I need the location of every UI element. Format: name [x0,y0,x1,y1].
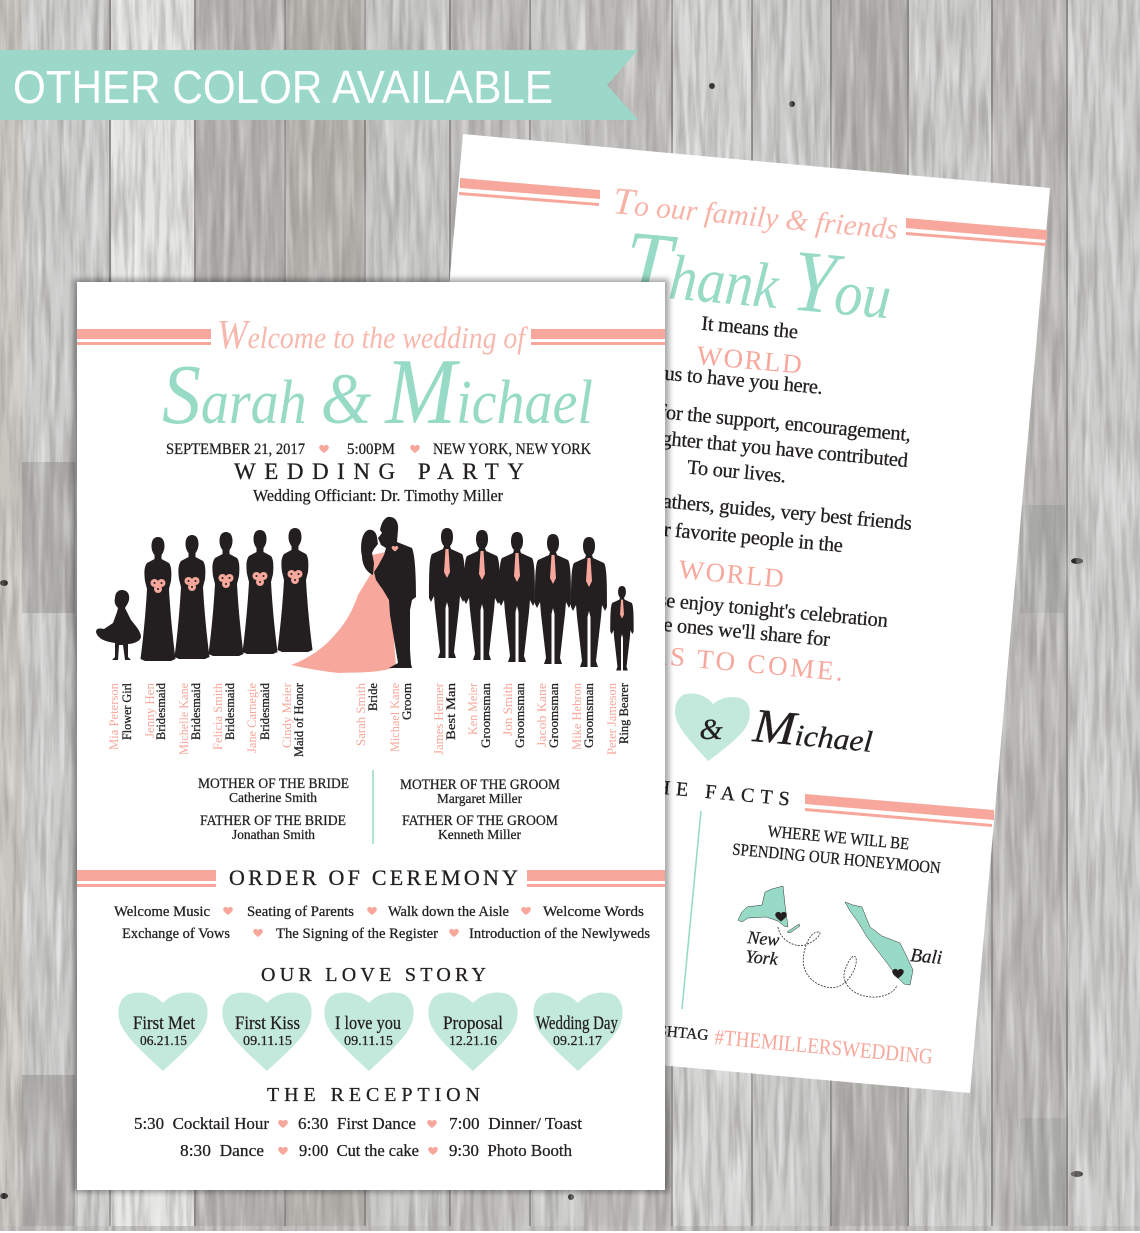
wedding party names: Groom [400,683,414,720]
heading: wedding party: WEDDING PARTY [234,459,524,484]
wedding party names: Groomsman [513,682,527,748]
wedding party names: Ring Bearer [617,682,631,744]
love story hearts: First Met [133,1013,196,1034]
wedding party names: Cindy Meier [280,682,294,748]
welcome header [77,311,665,357]
ceremony items: The Signing of the Register [276,926,438,942]
wedding party names: Michelle Kane [177,683,191,755]
ceremony items: Walk down the Aisle [388,904,509,920]
wedding party names: Bridesmaid [223,682,237,740]
honeymoon map: New [746,927,780,950]
love story hearts: 12.21.16 [449,1034,497,1049]
message text: Please enjoy tonight's celebration [624,586,889,632]
bridesmaids [140,537,176,661]
message text: Thank you for the support, encouragement, [569,393,912,446]
wedding party names: Michael Kane [388,683,402,752]
hashtag: HASHTAG [635,1020,709,1044]
honeymoon heading [732,822,941,877]
groomsmen [429,528,465,658]
hashtag [635,1020,934,1069]
message text: Our fathers, guides, very best friends [620,487,913,535]
reception schedule [134,1114,582,1160]
parents of the couple: Catherine Smith [229,791,317,806]
ring bearer [610,586,634,670]
love story hearts: 06.21.15 [140,1034,187,1049]
wedding party names: Maid of Honor [292,682,306,757]
love story hearts [118,992,623,1071]
wedding party names: Felicia Smith [211,682,225,750]
heading: the facts [637,775,994,827]
header stripes [459,178,1047,246]
message text: WORLD [677,554,785,593]
honeymoon heading: SPENDING OUR HONEYMOON [732,840,941,877]
honeymoon map: York [745,946,780,969]
parents of the couple [198,770,560,844]
honeymoon map [738,886,943,997]
parents of the couple: MOTHER OF THE GROOM [400,777,560,793]
wedding party names: Jacob Kane [535,683,549,747]
wedding party names: Flower Girl [120,683,134,740]
heading: to our family and friends: To our family & friends [611,180,900,248]
wedding party names: Mia Peterson [107,682,121,750]
parents of the couple: MOTHER OF THE BRIDE [198,776,349,792]
love story hearts: 09.21.17 [553,1034,602,1049]
hashtag: #THEMILLERSWEDDING [714,1024,934,1069]
ceremony items: Introduction of the Newlyweds [469,926,650,942]
reception schedule: 5:30 Cocktail Hour [134,1114,269,1133]
wedding party names: Bridesmaid [154,682,168,740]
wedding party names: Mike Hebron [570,682,584,750]
message text: to us to have you here. [644,361,824,399]
message text: It means the [700,313,799,343]
parents of the couple: Margaret Miller [437,792,522,807]
wedding party names: Groomsman [479,682,493,748]
signature with heart: Michael [750,699,875,763]
wedding party names: Bridesmaid [258,682,272,740]
banner: other color available: OTHER COLOR AVAILABLE [13,61,553,113]
parents of the couple: FATHER OF THE GROOM [402,813,558,829]
heading: order of ceremony: ORDER OF CEREMONY [229,865,518,890]
date, time, place: 5:00PM [347,441,395,458]
message text: To our lives. [686,457,787,487]
wedding party names: Jon Smith [501,682,515,736]
welcome header: Welcome to the wedding of [217,311,529,357]
flower girl [96,590,141,660]
parents of the couple: Jonathan Smith [232,828,315,843]
silhouettes [96,517,634,673]
reception schedule: 6:30 First Dance [298,1114,416,1133]
reception schedule: 7:00 Dinner/ Toast [449,1114,582,1133]
couple names: Sarah & Michael [162,340,593,444]
wedding party names: Jenny Hen [143,682,157,738]
love story hearts: Wedding Day [536,1013,618,1034]
date, time, place: SEPTEMBER 21, 2017 [166,441,305,458]
heading: the facts: THE FACTS [637,775,797,811]
signature with heart [671,692,875,764]
wedding party names: Groomsman [582,682,596,748]
wedding party names: Sarah Smith [354,682,368,746]
ceremony items: Exchange of Vows [122,926,230,942]
heading: thank you: Thank You [620,211,896,339]
message text: WORLD [695,340,803,379]
parents of the couple: FATHER OF THE BRIDE [200,813,346,829]
ceremony items: Seating of Parents [247,904,354,920]
reception schedule: 9:00 Cut the cake [299,1141,419,1160]
message text: and the ones we'll share for [614,610,831,651]
officiant: Wedding Officiant: Dr. Timothy Miller [253,486,503,505]
honeymoon heading: WHERE WE WILL BE [767,822,910,853]
reception schedule: 8:30 Dance [180,1141,264,1160]
message text [569,313,913,687]
wedding party names: Ken Meier [466,682,480,735]
wedding party names: Jane Carnegie [245,683,259,753]
reception schedule: 9:30 Photo Booth [449,1141,572,1160]
love story hearts: 09.11.15 [243,1034,292,1049]
love story hearts: First Kiss [235,1013,300,1034]
parents of the couple: Kenneth Miller [438,828,521,843]
ceremony items [114,904,650,942]
wedding party names: Bride [366,683,380,711]
message text: YEARS TO COME. [585,633,847,687]
date, time, place: NEW YORK, NEW YORK [433,441,591,458]
panel: thank-you card (back) [380,134,1050,1093]
wedding party names: Bridesmaid [189,682,203,740]
wedding party names: Peter Jameson [605,682,619,755]
message text: our favorite people in the [643,517,844,557]
panel: wedding programme card (front) [77,282,665,1190]
heading: our love story: OUR LOVE STORY [261,964,486,986]
love story hearts: 09.11.15 [344,1034,393,1049]
wedding party names: Groomsman [547,682,561,748]
wedding party names [107,682,631,757]
message text: and laughter that you have contributed [603,422,909,472]
heading: the reception: THE RECEPTION [267,1084,480,1106]
bride and groom [291,552,396,673]
heading: order of ceremony [77,865,665,890]
wedding party names: Best Man [444,682,458,740]
love story hearts: Proposal [443,1013,503,1034]
honeymoon map: Bali [910,945,943,969]
love story hearts: I love you [335,1013,401,1034]
ceremony items: Welcome Music [114,904,210,920]
wedding party names: James Henner [432,682,446,755]
ceremony items: Welcome Words [543,904,644,920]
date, time, place [166,441,591,458]
banner: other color available [0,50,638,120]
signature with heart: & [699,713,723,746]
